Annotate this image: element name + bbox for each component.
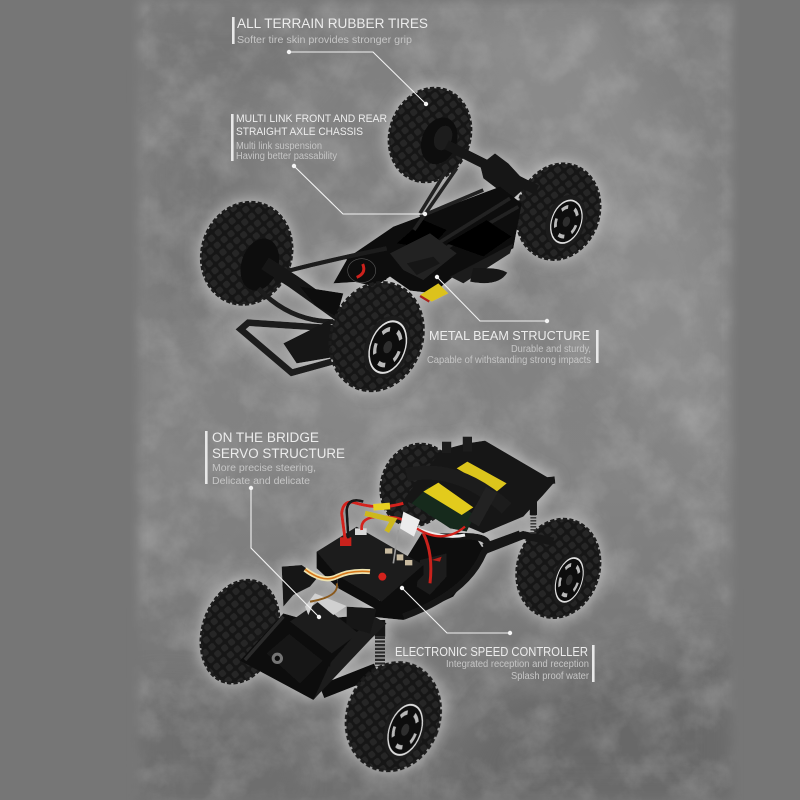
icon: right tire	[504, 508, 612, 628]
background: flat grey with terrain texture band	[136, 0, 734, 797]
callout: on the bridge servo structure: SERVO STRUCTURE	[212, 446, 345, 461]
callout: on the bridge servo structure: Delicate and delicate	[212, 476, 310, 487]
callout: metal beam structure	[427, 275, 599, 366]
callout: all terrain rubber tires: ALL TERRAIN RUBBER TIRES	[237, 15, 428, 31]
lipo battery with label and strap	[407, 462, 507, 532]
callout: electronic speed controller	[395, 586, 595, 682]
bottom car: top view of crawler with electronics	[188, 434, 612, 784]
callout: on the bridge servo structure: ON THE BRIDGE	[212, 430, 319, 445]
servo tower	[282, 565, 318, 607]
icon: far tire	[370, 434, 464, 536]
servo wires	[305, 569, 370, 602]
callout: all terrain rubber tires: Softer tire skin provides stronger grip	[237, 35, 412, 46]
battery tray	[403, 437, 555, 533]
callout: metal beam structure: Capable of withstanding strong impacts	[427, 355, 591, 366]
battery glimpse in yellow	[420, 283, 448, 302]
callout: electronic speed controller: ELECTRONIC SPEED CONTROLLER	[395, 645, 588, 659]
callout: on the bridge servo structure: More precise steering,	[212, 463, 316, 474]
callout: electronic speed controller: Splash proof water	[511, 671, 590, 682]
rear axle with differential	[447, 145, 537, 200]
callout: metal beam structure: METAL BEAM STRUCTURE	[429, 328, 590, 343]
callout: multi link chassis: MULTI LINK FRONT AND REAR	[236, 113, 387, 125]
icon: right tire	[503, 152, 613, 271]
callout: multi link chassis	[231, 113, 427, 216]
callout: on the bridge servo structure	[205, 430, 345, 619]
callout: electronic speed controller: Integrated reception and reception	[446, 659, 589, 670]
electronic speed controller box	[317, 527, 423, 613]
front axle and bumper	[241, 263, 343, 373]
motor label area	[417, 553, 447, 595]
callout: all terrain rubber tires	[232, 15, 428, 106]
frame chassis	[240, 533, 520, 700]
icon: rear top tire	[376, 77, 484, 193]
chassis frame	[285, 168, 522, 293]
red wire detail	[348, 259, 376, 283]
callout: multi link chassis: Multi link suspension	[236, 141, 322, 152]
icon: front tire	[331, 649, 455, 784]
icon: front tire	[315, 269, 438, 404]
callout: multi link chassis: Having better passability	[236, 151, 337, 162]
shocks and rear linkage	[322, 480, 555, 692]
white connector	[400, 512, 420, 537]
top car: underside view of crawler chassis	[188, 77, 613, 404]
steering servo body	[288, 593, 358, 667]
callout: metal beam structure: Durable and sturdy,	[511, 344, 591, 355]
callout: multi link chassis: STRAIGHT AXLE CHASSIS	[236, 126, 363, 138]
icon: left tire	[188, 190, 305, 316]
wiring harness	[342, 500, 465, 583]
icon: left tire	[188, 570, 292, 693]
